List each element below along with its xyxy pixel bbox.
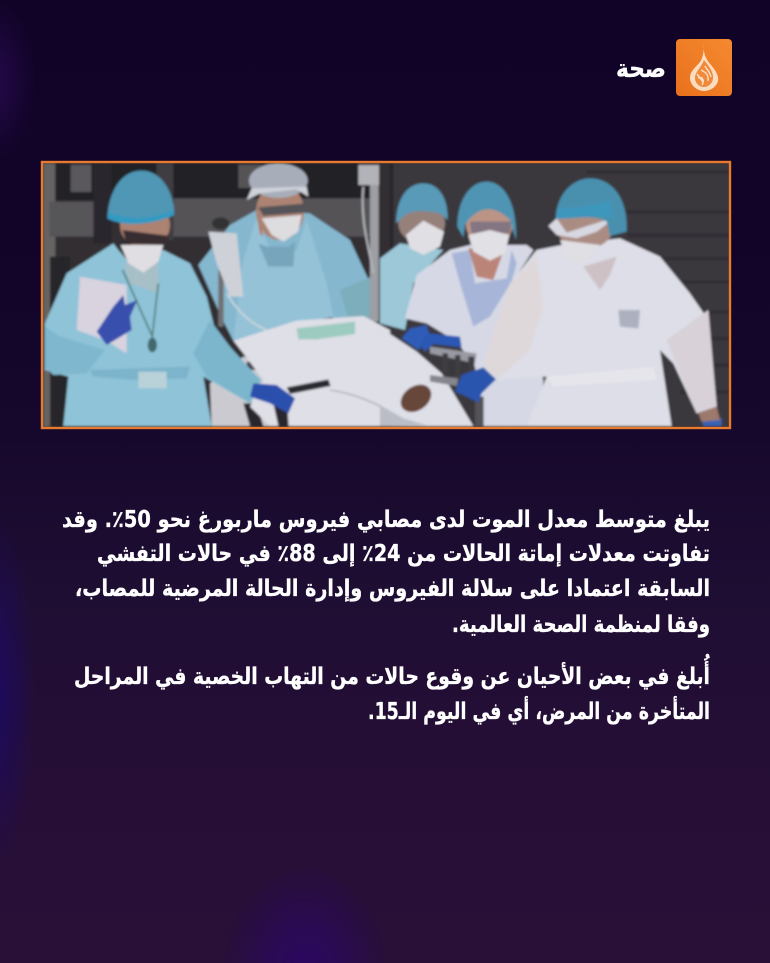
back nurse [198,210,377,341]
section label: health: صحة [616,54,666,83]
equipment [210,357,273,426]
paragraph 1: fatality rates: وفقا لمنظمة الصحة العالمية. [452,612,710,638]
IV pole [370,165,379,322]
paragraph 2: orchitis in late stages [74,653,710,725]
bed rail and left bed sheet [430,347,477,363]
left nurse [45,243,262,426]
bed sheet [233,316,390,426]
paragraph 1: fatality rates [62,507,710,638]
middle nurse [405,245,543,426]
gloves [402,325,430,350]
right nurse [514,236,705,427]
photo: medical staff wheeling a patient [42,162,730,428]
back-left nurse [380,243,443,330]
logo: Al Jazeera orange tile [676,39,732,96]
IV bag and stand [218,270,224,327]
paragraph 1: fatality rates: تفاوتت معدلات إماتة الحالات من 24٪ إلى 88٪ في حالات التفشي [97,541,710,567]
